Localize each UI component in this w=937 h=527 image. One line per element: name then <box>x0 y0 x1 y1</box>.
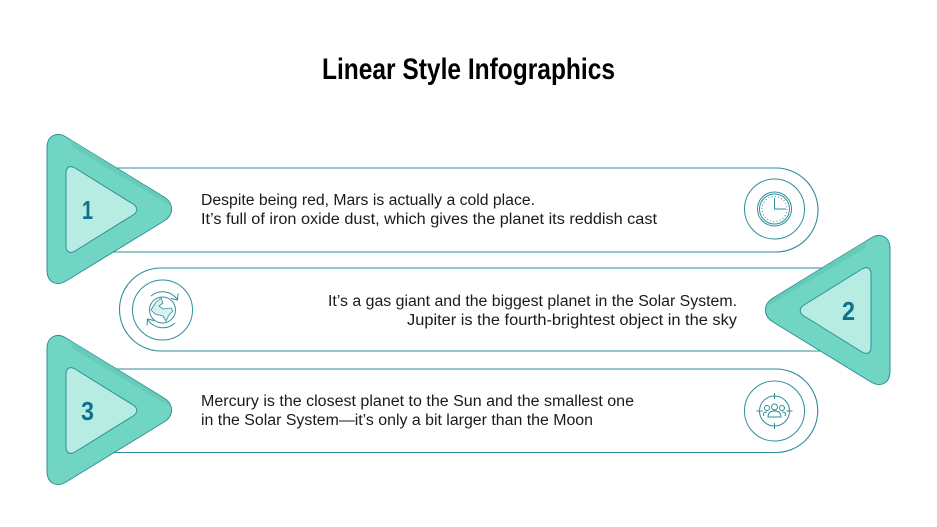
triangle badge 1 <box>47 134 172 284</box>
pill outline 2 <box>120 268 825 351</box>
text block 2: Jupiter is the fourth-brightest object in the sky <box>407 312 737 329</box>
triangle badge 3: 3 <box>81 396 94 426</box>
text block 2 <box>328 293 737 329</box>
text block 3: in the Solar System—it’s only a bit larger than the Moon <box>201 412 593 429</box>
pill outline 3 <box>100 369 818 452</box>
triangle badge 1: 1 <box>82 195 93 225</box>
icon: globe <box>132 280 192 340</box>
icon: people target <box>744 381 804 441</box>
text block 1: Despite being red, Mars is actually a cold place. <box>201 192 535 209</box>
text block 1: It’s full of iron oxide dust, which gives the planet its reddish cast <box>201 211 658 228</box>
panel: step 2 <box>120 235 890 385</box>
panel: step 1 <box>47 134 818 284</box>
text block 2: It’s a gas giant and the biggest planet in the Solar System. <box>328 293 737 310</box>
text block 1 <box>201 192 658 228</box>
title: Linear Style Infographics <box>322 53 615 86</box>
pill outline 1 <box>100 168 818 252</box>
icon: clock <box>744 179 804 239</box>
panel: step 3 <box>47 335 818 485</box>
triangle badge 2 <box>766 235 890 385</box>
text block 3: Mercury is the closest planet to the Sun and the smallest one <box>201 393 634 410</box>
text block 3 <box>201 393 634 429</box>
triangle badge 3 <box>47 335 172 485</box>
triangle badge 2: 2 <box>842 296 855 326</box>
